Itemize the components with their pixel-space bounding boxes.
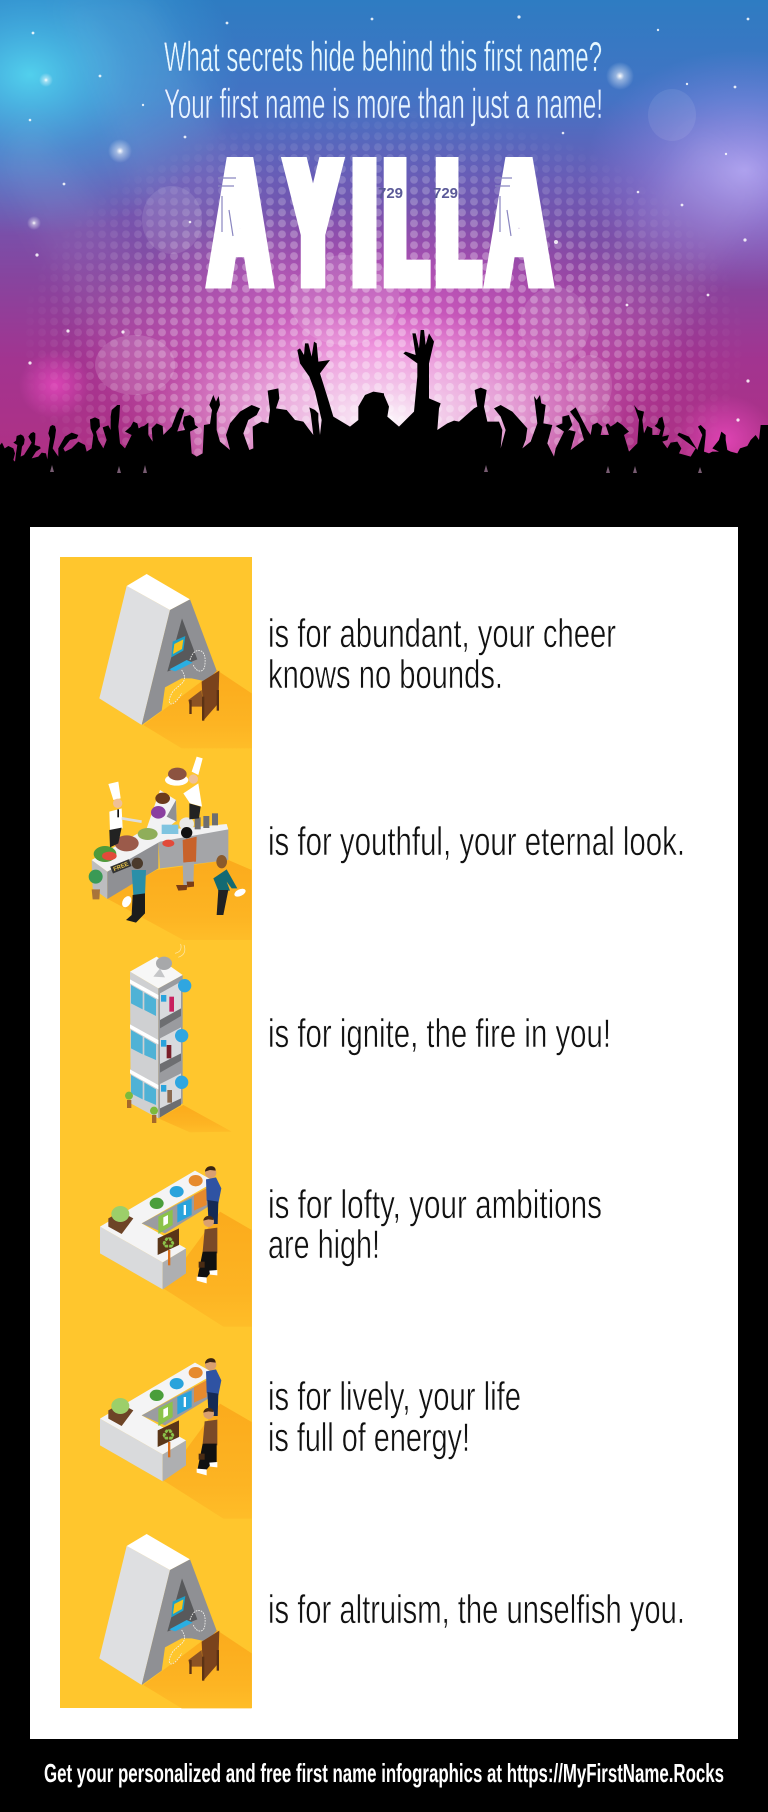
text: abundant: is for abundant, your cheer xyxy=(268,612,616,656)
hero: concert stage banner xyxy=(0,0,768,473)
distressed stamp marks on title: 729 xyxy=(433,185,458,202)
name title AYILLA: Y xyxy=(288,123,338,322)
FREE sign xyxy=(110,859,132,874)
name title AYILLA: L xyxy=(438,123,478,322)
illustration: buffet counter with chefs xyxy=(89,757,252,940)
text: lofty: is for lofty, your ambitions xyxy=(268,1183,602,1227)
text: ignite: is for ignite, the fire in you! xyxy=(268,1012,611,1056)
sparkle stars xyxy=(27,15,750,422)
illustration: recycling counter repeat xyxy=(100,1358,252,1519)
coloured glows xyxy=(0,0,768,500)
row 3: letter I xyxy=(125,944,611,1132)
crowd silhouette xyxy=(0,330,768,530)
white light behind the crowd xyxy=(145,310,625,530)
soft bokeh blobs xyxy=(95,89,696,415)
row 6: letter A xyxy=(99,1534,685,1708)
illustration: isometric letter A with chair xyxy=(99,574,252,748)
yellow illustration strip xyxy=(60,557,252,1708)
FREE sign: FREE xyxy=(113,862,130,873)
illustration: office tower xyxy=(125,944,232,1132)
text: lively: is full of energy! xyxy=(268,1416,470,1460)
row 4: letter L xyxy=(100,1166,602,1327)
LED dot wall xyxy=(43,125,718,456)
stage background gradient xyxy=(0,0,768,500)
white content panel xyxy=(30,527,738,1739)
hero: concert stage banner: A xyxy=(489,123,549,322)
row 2: letter Y xyxy=(89,757,685,940)
name title AYILLA: A xyxy=(211,123,269,322)
text: lofty: are high! xyxy=(268,1223,380,1267)
distressed stamp marks on title: 729 xyxy=(378,185,403,202)
distressed stamp marks on title xyxy=(218,178,512,236)
row 5: letter L xyxy=(100,1358,521,1519)
name title AYILLA: L xyxy=(386,123,426,322)
text: abundant: knows no bounds. xyxy=(268,653,503,697)
illustration: isometric letter A repeat xyxy=(99,1534,252,1708)
name title AYILLA xyxy=(211,123,549,322)
row 1: letter A xyxy=(99,574,616,748)
text: lively: is for lively, your life xyxy=(268,1375,521,1419)
name title AYILLA: I xyxy=(354,123,374,322)
small light gaps between crowd members xyxy=(50,465,702,473)
illustration: recycling counter xyxy=(100,1166,252,1327)
